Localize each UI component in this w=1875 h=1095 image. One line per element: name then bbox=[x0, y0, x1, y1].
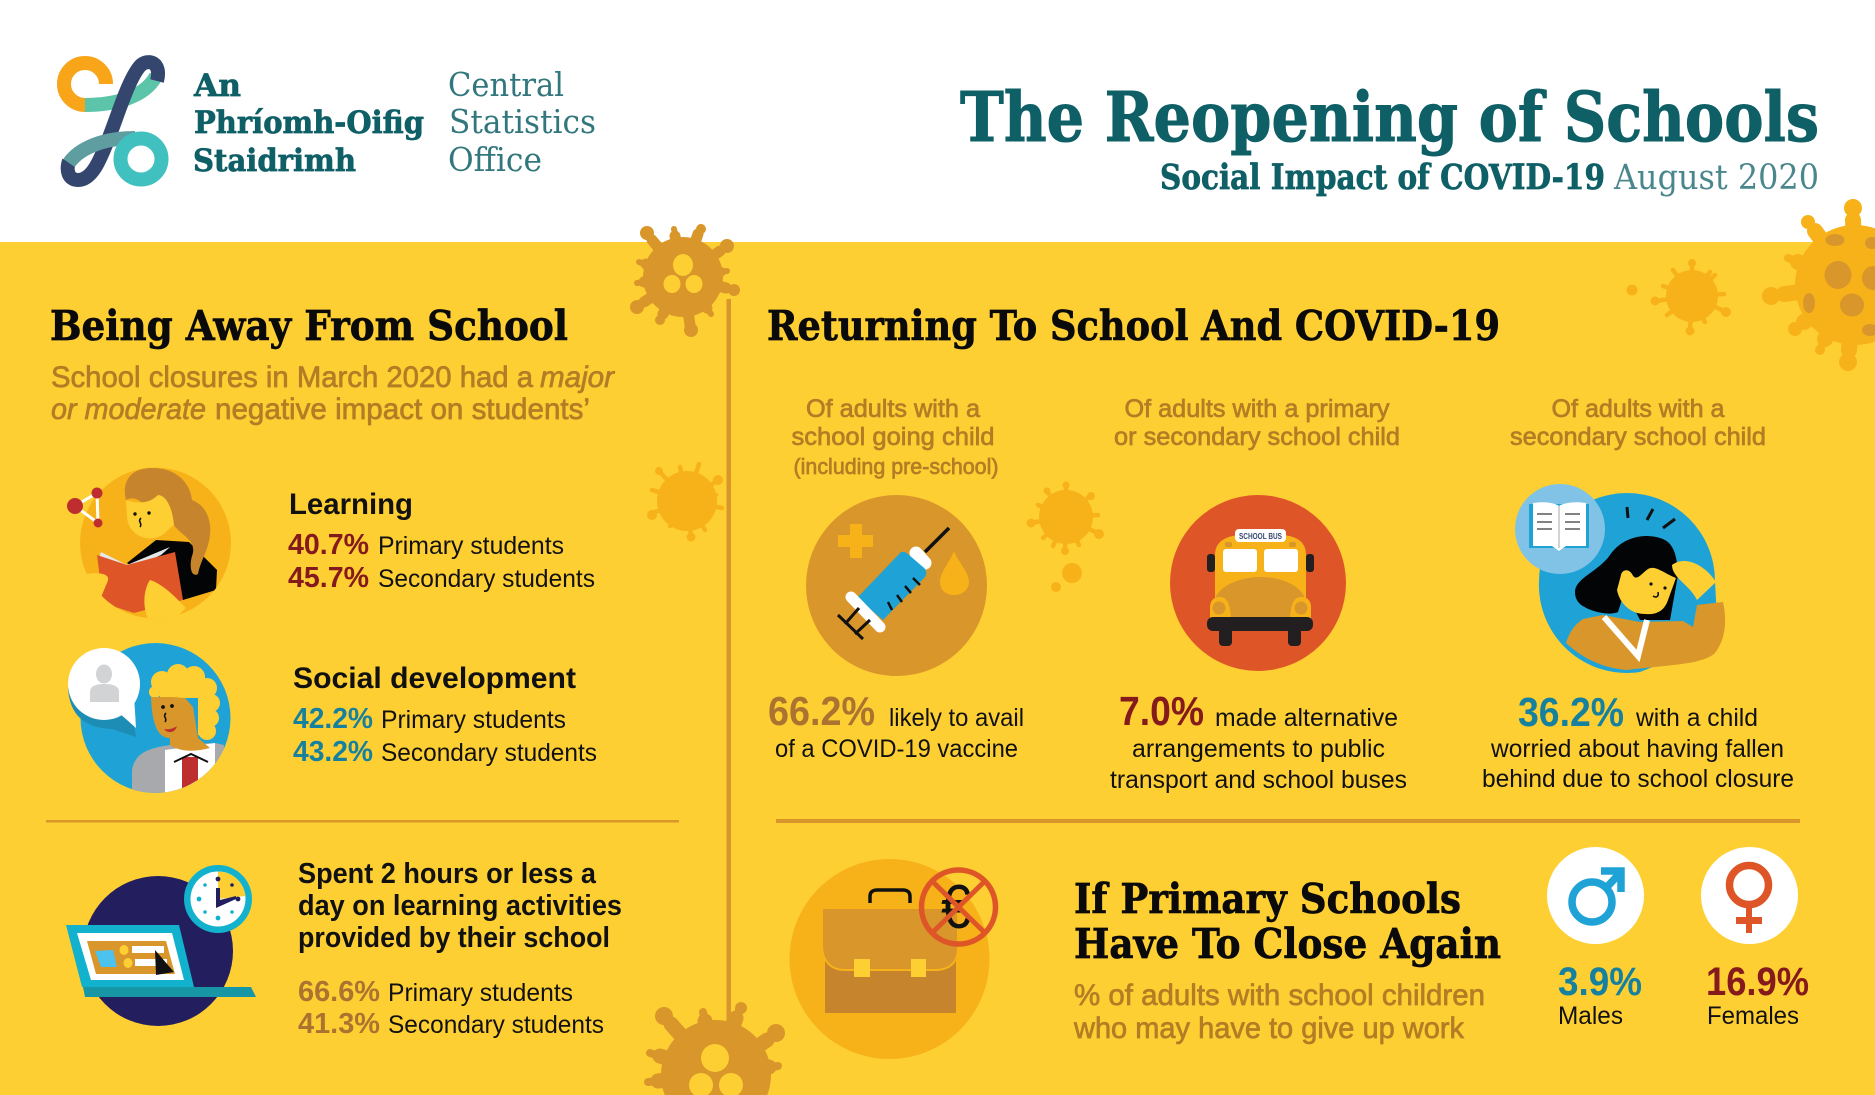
stats: learning: Secondary students bbox=[378, 565, 595, 593]
subheading: school closures bbox=[51, 361, 615, 426]
column: vaccine: Of adults with a bbox=[806, 395, 980, 423]
logo: Phríomh-Oifig bbox=[194, 105, 424, 141]
stats: learning: Learning bbox=[289, 488, 413, 521]
subheading: school closures: School closures in March 2020 had a bbox=[51, 361, 533, 394]
column: school bus: arrangements to public bbox=[1132, 735, 1385, 763]
column divider bbox=[726, 299, 731, 1029]
stats: learning activities: Primary students bbox=[388, 979, 573, 1007]
title: August 2020 bbox=[1613, 158, 1819, 198]
column: school bus bbox=[1110, 395, 1407, 794]
stat: males: 3.9% bbox=[1558, 960, 1642, 1004]
logo: Office bbox=[448, 140, 542, 179]
stats: social development bbox=[293, 662, 597, 768]
column: worried parent: 36.2% bbox=[1518, 689, 1624, 735]
column: worried parent: Of adults with a bbox=[1552, 395, 1725, 423]
column: worried parent: with a child bbox=[1635, 704, 1758, 732]
logo: Central bbox=[448, 65, 564, 104]
stats: learning: 40.7% bbox=[288, 529, 369, 561]
icon: school bus: SCHOOL BUS bbox=[1239, 531, 1282, 541]
logo bbox=[64, 62, 596, 180]
stats: learning: Primary students bbox=[378, 532, 564, 560]
virus: top left bbox=[630, 224, 740, 337]
logo: Staidrimh bbox=[193, 143, 356, 179]
column: worried parent: worried about having fallen bbox=[1490, 735, 1784, 763]
subheading: adults with school children bbox=[1073, 979, 1485, 1045]
column: school bus: transport and school buses bbox=[1110, 766, 1407, 794]
logo: Statistics bbox=[449, 102, 596, 141]
icon: school bus bbox=[1170, 495, 1346, 671]
icon: briefcase and crossed euro: € bbox=[941, 873, 971, 942]
column: school bus: Of adults with a primary bbox=[1124, 395, 1390, 423]
column: worried parent: secondary school child bbox=[1510, 423, 1766, 451]
stats: social development: Social development bbox=[293, 662, 576, 695]
subheading: school closures: major bbox=[540, 361, 615, 394]
icon: syringe bbox=[806, 495, 987, 676]
stats: learning activities: 66.6% bbox=[298, 976, 380, 1008]
column: school bus: or secondary school child bbox=[1114, 423, 1400, 451]
virus: top right small bbox=[1626, 259, 1731, 336]
heading: if primary schools close: Have To Close Again bbox=[1074, 920, 1501, 968]
virus: bottom bbox=[648, 1002, 785, 1095]
stat: males: Males bbox=[1558, 1002, 1623, 1030]
subheading: school closures: negative impact on students’ bbox=[215, 393, 590, 426]
column: school bus: made alternative bbox=[1215, 704, 1398, 732]
stats: learning activities: 41.3% bbox=[298, 1008, 380, 1040]
icon: woman thinking about book bbox=[1515, 484, 1725, 673]
column: vaccine: 66.2% bbox=[768, 688, 875, 734]
heading: being away from school: Being Away From School bbox=[50, 302, 568, 350]
logo: An bbox=[193, 68, 241, 104]
icon: student and speech bubble bbox=[68, 643, 230, 795]
stats: social development: 43.2% bbox=[293, 736, 373, 768]
virus: centre with droplets bbox=[1026, 482, 1104, 592]
stats: social development: Primary students bbox=[381, 706, 566, 734]
stat: females bbox=[1701, 847, 1809, 1030]
column: vaccine bbox=[768, 395, 1024, 763]
stats: learning activities: provided by their school bbox=[298, 922, 610, 954]
icon: girl reading bbox=[67, 468, 231, 625]
stat: females: Females bbox=[1707, 1002, 1799, 1030]
stats: learning activities bbox=[298, 858, 622, 1040]
title bbox=[960, 78, 1819, 198]
stats: learning activities: Spent 2 hours or less a bbox=[298, 858, 597, 890]
column: school bus: 7.0% bbox=[1119, 688, 1204, 734]
heading: if primary schools close: If Primary Schools bbox=[1074, 875, 1461, 923]
subheading: school closures: or moderate bbox=[51, 393, 206, 426]
virus: middle left bbox=[647, 464, 723, 542]
column: vaccine: of a COVID-19 vaccine bbox=[775, 735, 1018, 763]
subheading: adults with school children: % of adults with school children bbox=[1074, 979, 1485, 1012]
heading: if primary schools close bbox=[1074, 875, 1501, 968]
column: worried parent: behind due to school closure bbox=[1482, 765, 1794, 793]
stats: social development: Secondary students bbox=[381, 739, 597, 767]
column: vaccine: (including pre-school) bbox=[794, 454, 998, 479]
stats: social development: 42.2% bbox=[293, 703, 373, 735]
stats: learning activities: day on learning activities bbox=[298, 890, 622, 922]
stats: learning: 45.7% bbox=[288, 562, 369, 594]
virus: top right large bbox=[1762, 199, 1875, 371]
icon: laptop and clock bbox=[66, 865, 256, 1026]
stats: learning activities: Secondary students bbox=[388, 1011, 604, 1039]
column: vaccine: likely to avail bbox=[889, 704, 1024, 732]
title: Social Impact of COVID-19 bbox=[1160, 157, 1605, 198]
column: worried parent bbox=[1482, 395, 1794, 793]
subheading: adults with school children: who may have to give up work bbox=[1073, 1012, 1465, 1045]
stat: females: 16.9% bbox=[1706, 960, 1809, 1004]
stat: males bbox=[1547, 847, 1644, 1030]
stats: learning bbox=[288, 488, 595, 594]
column: vaccine: school going child bbox=[792, 423, 994, 451]
icon: briefcase and crossed euro bbox=[790, 859, 996, 1059]
heading: returning to school: Returning To School And COVID-19 bbox=[767, 302, 1500, 350]
